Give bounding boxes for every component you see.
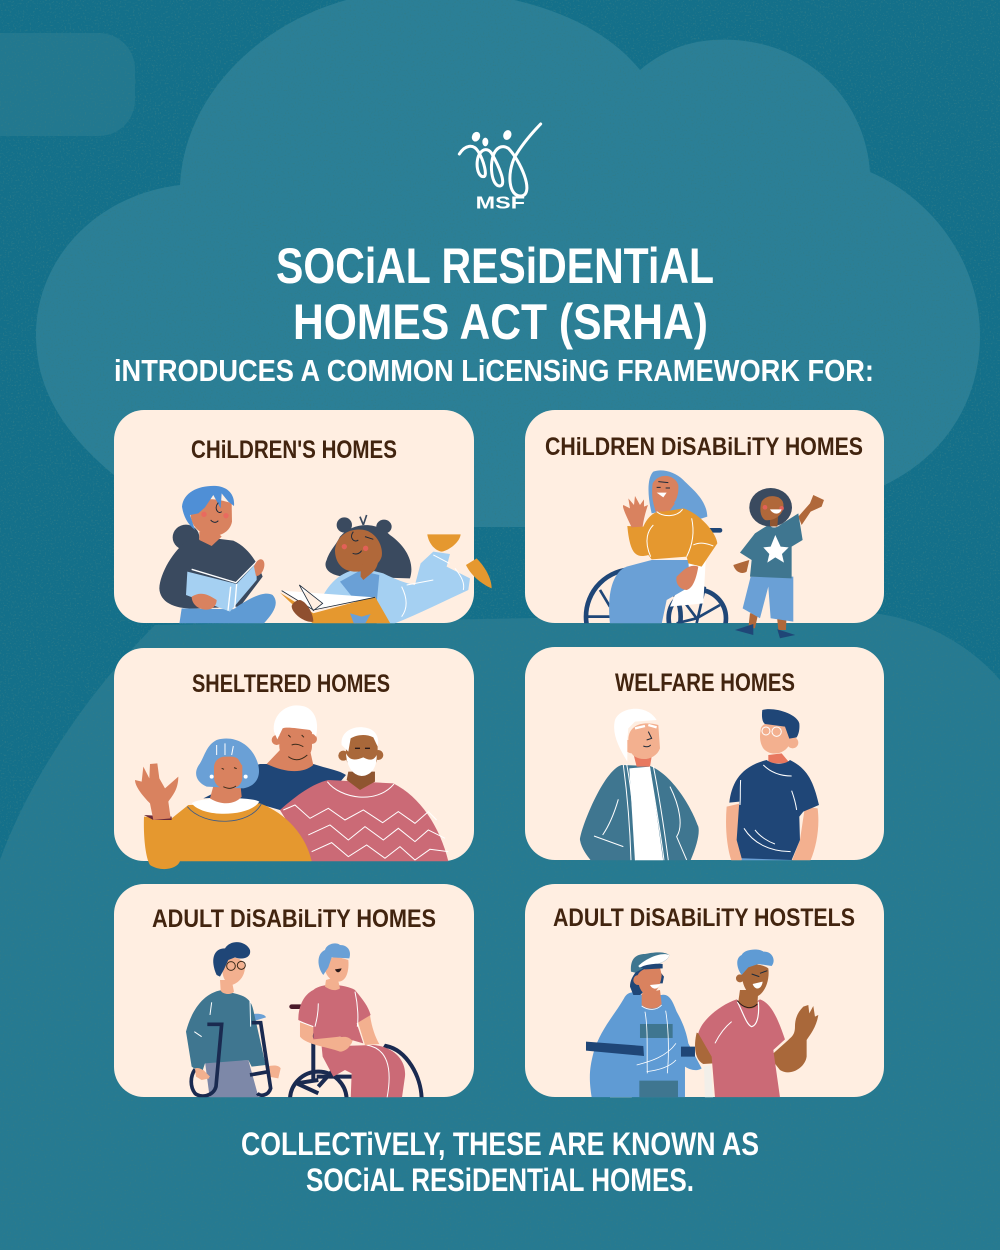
title: SOCiAL RESiDENTiAL [276, 238, 714, 294]
girl [280, 515, 470, 624]
title: HOMES ACT (SRHA) [293, 294, 708, 350]
illustration: woman in wheelchair and child [584, 470, 824, 638]
logo: MSF [459, 124, 541, 213]
child [733, 488, 824, 638]
title [276, 238, 714, 350]
illustration: two men [580, 709, 819, 862]
closing statement [241, 1126, 759, 1198]
subtitle: iNTRODUCES A COMMON LiCENSiNG FRAMEWORK FOR: [114, 353, 874, 388]
closing statement: SOCiAL RESiDENTiAL HOMES. [306, 1162, 694, 1198]
closing statement: COLLECTiVELY, THESE ARE KNOWN AS [241, 1126, 759, 1162]
panel: welfare homes [525, 647, 884, 862]
heading: children disability homes: CHiLDREN DiSABiLiTY HOMES [545, 433, 863, 461]
heading: welfare homes: WELFARE HOMES [615, 669, 795, 697]
panel: children's homes [114, 410, 492, 624]
illustration: man with crutch and friend waving [586, 949, 818, 1100]
younger man [726, 709, 819, 862]
panel: children disability homes [525, 410, 884, 638]
illustration: children reading [159, 486, 492, 624]
man in wheelchair [288, 943, 424, 1098]
heading: sheltered homes: SHELTERED HOMES [192, 670, 390, 698]
panel: adult disability homes [114, 884, 474, 1098]
man with cap [586, 952, 713, 1100]
illustration: man on crutches and man in wheelchair [186, 942, 424, 1098]
older man [580, 709, 699, 862]
illustration: three older adults [135, 705, 448, 869]
panel: sheltered homes [114, 648, 474, 869]
man on crutches [186, 942, 281, 1100]
man waving [695, 949, 818, 1097]
logo: MSF: MSF [476, 193, 525, 213]
heading: adult disability homes: ADULT DiSABiLiTY HOMES [152, 905, 436, 933]
heading: adult disability hostels: ADULT DiSABiLiTY HOSTELS [553, 904, 855, 932]
panel: adult disability hostels [525, 884, 884, 1100]
heading: children's homes: CHiLDREN'S HOMES [191, 436, 397, 464]
